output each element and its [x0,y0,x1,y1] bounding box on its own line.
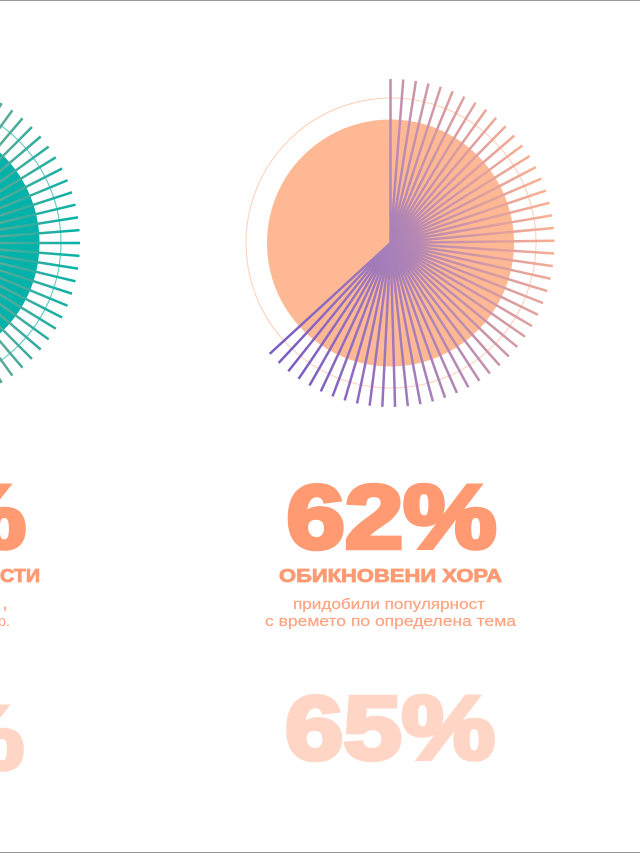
teal disk [0,120,40,366]
top border line [0,0,640,1]
chart: peach radial chart 62% [246,77,557,409]
purple-to-peach radial rays [266,77,557,409]
description line 2: с времето по определена тема [265,614,517,630]
center column: 62% statistic [265,468,517,630]
big number 62%: 62% [286,468,496,568]
teal thin ring [0,98,61,388]
left column text, cropped at left edge [0,468,40,630]
peach disk [267,120,514,366]
description line 1: придобили популярност [293,597,485,613]
peach thin ring [246,98,536,388]
left description fragment line 1: , [3,597,7,613]
chart: teal radial chart, cropped at left edge [0,102,80,384]
left heading fragment: СТИ [0,566,40,586]
teal radial rays [0,102,80,384]
heading: ОБИКНОВЕНИ ХОРА [279,566,502,586]
big number 65%, faded: 65% [285,679,495,779]
bottom border line [0,852,640,853]
